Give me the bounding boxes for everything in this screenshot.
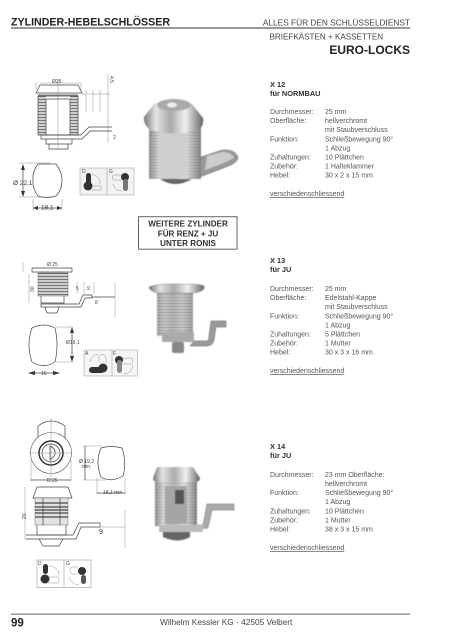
product spec: X 12: X 12 [270,80,285,89]
product spec: X 12: Zubehör: [270,164,298,170]
technical drawing: X 14 front view [29,418,72,484]
technical drawing: X 14 cam outline: 18,1 min [103,490,122,496]
page number: 99 [11,618,24,630]
technical drawing: X 14 side view: 20 [22,513,28,519]
technical drawing: X 12 side view: Ø25 [52,79,62,85]
product spec: X 13: Schließbewegung 90° [325,312,393,320]
icon: X 14 rotation diagram: D [38,561,42,567]
technical drawing: X 12 cam outline [13,163,62,212]
product spec: X 14 [270,442,393,552]
technical drawing: X 14 cam outline: Ø 19,2 [79,459,94,465]
product spec: X 13: mit Staubverschluss [325,304,388,311]
product spec: X 13: Zuhaltungen: [270,332,311,338]
product spec: X 13: 1 Mutter [325,340,351,348]
product spec: X 13: 30 x 3 x 16 mm [325,350,373,356]
product spec: X 13: Funktion: [270,314,299,320]
product spec: X 12: Zuhaltungen: [270,154,311,162]
photo: X 12 lock [144,99,238,184]
icon: X 12 rotation diagram [80,168,134,195]
product spec: X 12 [270,80,393,198]
product spec: X 12: Hebel: [270,172,290,180]
product spec: X 14: für JU [270,451,291,460]
product spec: X 14: 1 Mutter [325,518,351,524]
footer address: Wilhelm Kessler KG · 42505 Velbert [160,617,293,627]
technical drawing: X 12 side view: 2 [113,135,116,141]
product spec: X 14: 23 mm Oberfläche: [325,472,385,479]
product spec: X 14: Zuhaltungen: [270,508,311,516]
photo: X 13 lock [149,284,226,353]
product spec: X 14: verschiedenschliessend [270,545,344,552]
title: ZYLINDER-HEBELSCHLÖSSER [11,16,170,28]
product spec: X 14: Funktion: [270,490,299,497]
header [11,16,410,57]
technical drawing: X 13 cam outline: Ø19,1 [66,340,80,346]
technical drawing: X 13 side view: 8 [95,300,98,306]
technical drawing: X 14 cam outline: min. [82,464,91,470]
product spec: X 14: 10 Plättchen [325,508,364,516]
icon: X 13 rotation diagram: F [113,351,116,357]
technical drawing: X 13 side view [23,262,115,317]
technical drawing: X 13 side view: 30 [30,286,36,292]
icon: X 13 rotation diagram: A [85,351,89,357]
technical drawing: X 12 side view: 4,5 [108,76,114,83]
product spec: X 14: 38 x 3 x 15 mm [325,526,373,534]
technical drawing: X 13 cam outline [28,325,80,377]
product spec: X 12: Durchmesser: [270,109,314,116]
product spec: X 12: 25 mm [325,109,347,116]
icon: X 12 rotation diagram: D [82,169,86,175]
callout: further cylinders: UNTER RONIS [160,239,216,248]
product spec: X 12: 1 Halteklammer [325,164,375,170]
product spec: X 12: für NORMBAU [270,89,320,98]
subcategory: BRIEFKÄSTEN + KASSETTEN [270,33,383,42]
product spec: X 14: 1 Abzug [325,499,350,506]
callout: further cylinders: FÜR RENZ + JU [158,230,218,238]
product spec: X 12: Oberfläche: [270,118,306,125]
callout: further cylinders: WEITERE ZYLINDER [148,220,228,228]
product spec: X 12: mit Staubverschluss [325,127,388,134]
technical drawing: X 14 side view [22,487,125,548]
footer [11,614,410,630]
product spec: X 12: Funktion: [270,136,299,144]
product spec: X 12: verschiedenschliessend [270,191,344,198]
product spec: X 13: Zubehör: [270,340,298,348]
icon: X 14 rotation diagram: G [66,561,70,567]
product spec: X 12: 1 Abzug [325,146,350,152]
technical drawing: X 12 cam outline: 18,1 [41,204,54,212]
technical drawing: X 12 cam outline: Ø 22,1 [13,180,33,187]
icon: X 13 rotation diagram [84,350,138,376]
product spec: X 13: Hebel: [270,350,290,356]
product spec: X 13: für JU [270,265,291,274]
callout: further cylinders [138,217,237,249]
product spec: X 13: Durchmesser: [270,286,314,293]
product spec: X 14: Zubehör: [270,518,298,524]
brand heading: EURO-LOCKS [329,43,410,57]
product spec: X 13: 25 mm [325,286,347,293]
product spec: X 13: Edelstahl-Kappe [325,295,376,302]
photo: X 14 lock [153,467,234,540]
technical drawing: X 14 side view: 9 [99,529,103,536]
product spec: X 13: verschiedenschliessend [270,368,344,375]
product spec: X 14: Durchmesser: [270,472,314,479]
product spec: X 14: hellverchromt [325,481,367,488]
product spec: X 14: Hebel: [270,526,290,534]
technical drawing: X 13 side view: 9 [87,286,90,292]
icon: X 14 rotation diagram [37,560,91,588]
technical drawing: X 14 front view: D 25 [47,478,58,484]
technical drawing: X 13 side view: Ø 25 [47,262,58,268]
product spec: X 12: 10 Plättchen [325,154,364,162]
product spec: X 12: Schließbewegung 90° [325,136,393,144]
icon: X 12 rotation diagram: G [109,169,113,175]
product spec: X 14: X 14 [270,442,286,451]
product spec: X 12: hellverchromt [325,118,367,125]
product spec: X 13: 5 Plättchen [325,332,360,338]
product spec: X 13: Oberfläche: [270,295,306,302]
technical drawing: X 13 cam outline: 16 [41,371,47,377]
product spec: X 12: 30 x 2 x 15 mm [325,172,373,180]
product spec: X 13: X 13 [270,256,285,265]
technical drawing: X 13 side view: 5 [76,286,79,292]
technical drawing: X 14 cam outline [79,446,125,496]
technical drawing: X 12 side view [36,74,116,150]
product spec: X 13 [270,256,393,375]
product spec: X 13: 1 Abzug [325,322,350,330]
header category: ALLES FÜR DEN SCHLÜSSELDIENST [263,18,410,28]
product spec: X 14: Schließbewegung 90° [325,489,393,497]
